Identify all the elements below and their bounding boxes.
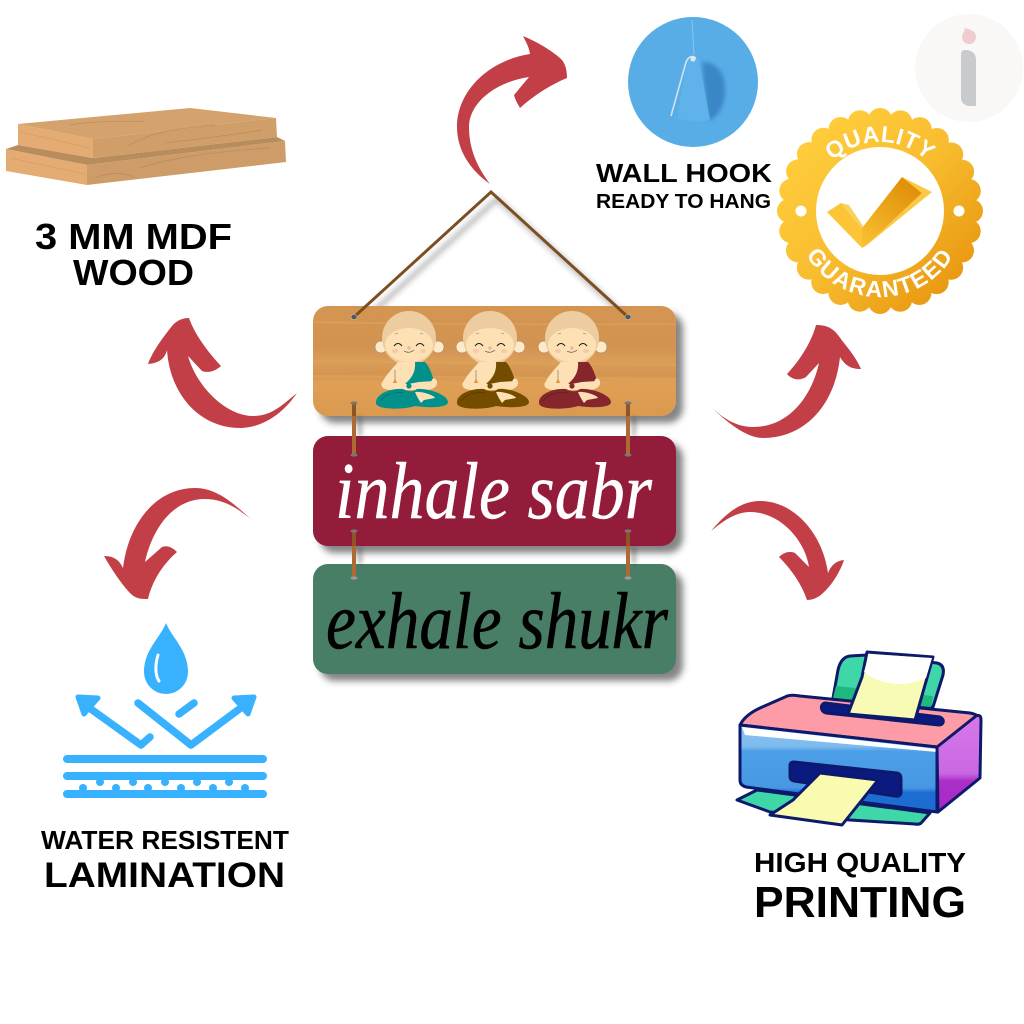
- panel: wood material: [6, 108, 286, 293]
- connecting ropes: [350, 314, 634, 580]
- board: exhale shukr: exhale shukr: [326, 578, 669, 666]
- heading: water resistent lamination: [41, 825, 289, 895]
- heading: 3 MM MDF WOOD: WOOD: [73, 252, 194, 293]
- board: wood with monks: [313, 306, 676, 416]
- heading: high quality printing: PRINTING: [754, 878, 966, 927]
- heading: 3 MM MDF WOOD: 3 MM MDF: [35, 216, 232, 257]
- monk brown: [456, 311, 529, 409]
- heading: 3 MM MDF WOOD: [35, 216, 232, 293]
- heading: high quality printing: HIGH QUALITY: [754, 847, 966, 878]
- panel: printing: [737, 652, 981, 927]
- panel: water resistance: [41, 623, 289, 895]
- board: exhale shukr: [313, 564, 676, 674]
- icon: water droplet and layers: [67, 623, 263, 794]
- monk maroon: [538, 311, 611, 409]
- arrow: to printing: [711, 501, 844, 600]
- rope shadow: [360, 199, 634, 324]
- subheading: ready to hang: READY TO HANG: [596, 191, 771, 213]
- badge text: guaranteed: GUARANTEED: [809, 249, 950, 298]
- heading: water resistent lamination: LAMINATION: [44, 856, 285, 895]
- quality badge: [777, 108, 983, 314]
- heading: high quality printing: [754, 847, 966, 927]
- badge text: quality: QUALITY: [826, 126, 936, 158]
- panel: wall hook: [596, 17, 772, 213]
- heading: water resistent lamination: WATER RESISTENT: [41, 825, 289, 855]
- monk teal: [375, 311, 448, 409]
- panel: hanging sign: [313, 192, 676, 674]
- icon: check mark: [827, 177, 932, 248]
- arrow: to wood: [148, 318, 297, 428]
- hanging rope: [354, 192, 628, 317]
- arrow: to quality badge: [711, 325, 861, 438]
- watermark logo: [915, 14, 1023, 122]
- icon: wall hook: [628, 17, 758, 147]
- arrow: to wall hook: [457, 36, 567, 184]
- icon: printer: [737, 652, 981, 825]
- arrow: to water resistance: [104, 488, 253, 599]
- icon: MDF wood planks: [6, 108, 286, 185]
- board: inhale sabr: inhale sabr: [335, 448, 653, 536]
- heading: wall hook: WALL HOOK: [596, 158, 772, 188]
